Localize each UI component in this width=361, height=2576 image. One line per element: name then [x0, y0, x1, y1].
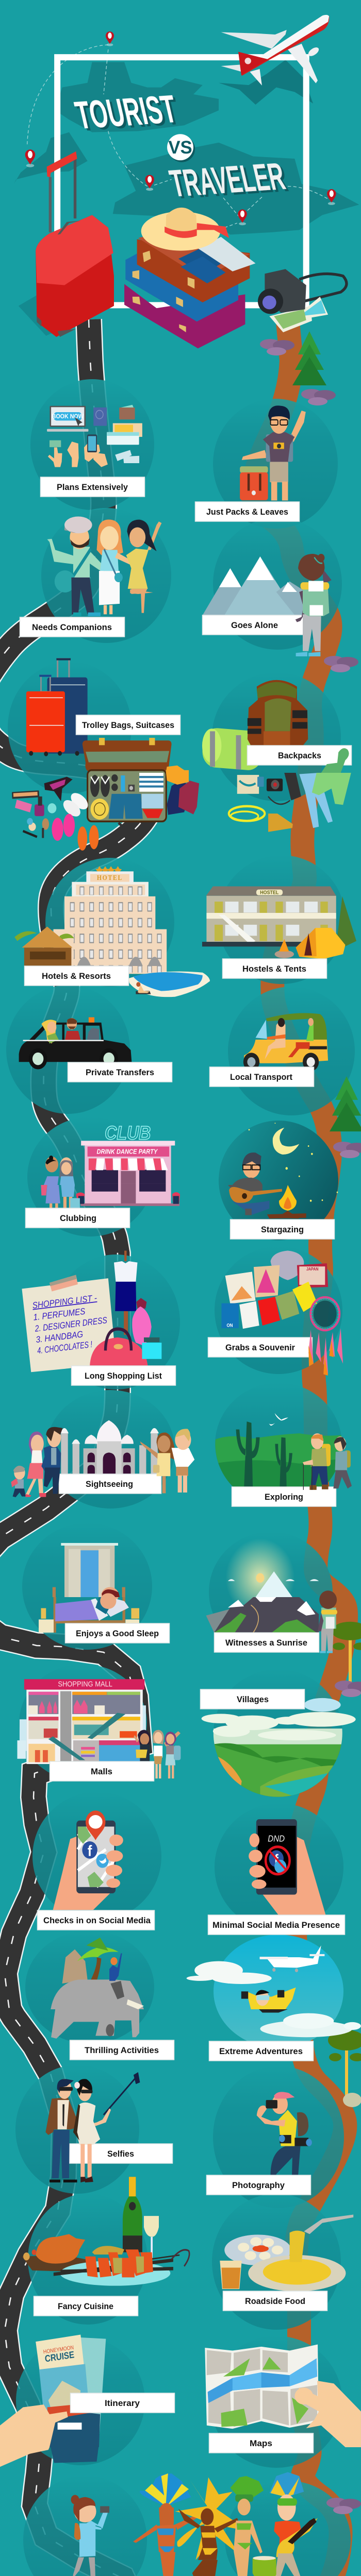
club base: [41, 1183, 180, 1208]
label: Just Packs & Leaves: Just Packs & Leaves: [206, 507, 288, 517]
dress, perfume and handbag: [90, 1251, 161, 1366]
title: tourist: TOURIST: [72, 88, 180, 138]
band 4: [22, 1183, 346, 1617]
label: Villages: [200, 1689, 304, 1709]
birds: [269, 1413, 288, 1426]
elephant lower: [51, 2009, 139, 2039]
label: Photography: Photography: [232, 2180, 285, 2190]
label: Exploring: Exploring: [265, 1492, 303, 1502]
label: Hostels & Tents: Hostels & Tents: [242, 964, 306, 974]
label: Enjoys a Good Sleep: [65, 1623, 169, 1643]
shopping list note: 2. DESIGNER DRESS: [34, 1315, 108, 1334]
hotel building: HOTEL: [97, 874, 123, 882]
club building: [44, 1123, 175, 1185]
label: Hotels & Resorts: [25, 966, 129, 986]
dashed flight routes: [27, 45, 328, 228]
pool lounger: [136, 982, 151, 994]
extreme adventures plane and cloud: [187, 1945, 324, 2009]
checks-in phone: [53, 1810, 123, 1910]
label: Itinerary: Itinerary: [105, 2398, 140, 2408]
private car: [19, 1017, 132, 1070]
label: Checks in on Social Media: [37, 1910, 155, 1930]
band 6: [0, 2009, 361, 2447]
plans extensively icons: [47, 405, 142, 467]
label: Long Shopping List: [71, 1366, 175, 1385]
mall shoppers: [134, 1730, 180, 1778]
label: Trolley Bags, Suitcases: Trolley Bags, Suitcases: [82, 720, 174, 730]
label: Fancy Cuisine: [34, 2296, 138, 2316]
samba dancers: [133, 2473, 264, 2576]
itinerary brochure: [0, 2335, 106, 2447]
sightseeing families: [11, 1427, 194, 1497]
vs badge: VS: [168, 138, 192, 158]
label: Stargazing: [230, 1219, 334, 1239]
shopping list note: 1. PERFUMES: [33, 1307, 86, 1323]
label: Exploring: [232, 1487, 336, 1506]
thrilling activities elephant: [51, 1938, 144, 2009]
minimal social phone: DND: [268, 1834, 285, 1844]
dirt trail: [252, 322, 346, 2576]
label: Needs Companions: Needs Companions: [32, 622, 112, 632]
band 3: [12, 770, 356, 1185]
trolley bags: [26, 658, 88, 756]
label: Goes Alone: Goes Alone: [231, 620, 278, 630]
traveler gear: [229, 773, 351, 832]
souvenirs: [221, 1251, 328, 1329]
good sleep window: [53, 1543, 125, 1603]
village clouds: [202, 1698, 356, 1740]
photographer: [257, 2092, 312, 2176]
selfie couple: [45, 2072, 140, 2182]
label: Villages: Villages: [237, 1694, 269, 1704]
dreamcatcher: [308, 1297, 343, 1376]
label: Stargazing: Stargazing: [261, 1225, 304, 1234]
camera and photos: [258, 269, 347, 332]
hostel and tent: HOSTEL: [260, 890, 279, 896]
sleep bed: [39, 1593, 139, 1633]
red trolley suitcase: [19, 151, 114, 337]
label: Grabs a Souvenir: Grabs a Souvenir: [225, 1343, 295, 1352]
label: Local Transport: Local Transport: [230, 1072, 292, 1082]
shopping list note: [22, 1275, 116, 1372]
label: Sightseeing: [59, 1474, 161, 1494]
exploring hikers: [303, 1433, 352, 1490]
spoon in backpacks label: [321, 748, 349, 773]
shopping list note: 3. HANDBAG: [36, 1329, 84, 1345]
extreme lower: [259, 2009, 361, 2037]
label: Just Packs & Leaves: [195, 502, 299, 521]
sunrise glow and peak: [225, 1538, 319, 1617]
label: Minimal Social Media Presence: [208, 1915, 344, 1935]
shopping mall: [17, 1679, 146, 1764]
exploring landscape: [215, 1421, 341, 1487]
label: Enjoys a Good Sleep: Enjoys a Good Sleep: [76, 1629, 159, 1638]
needs companions group: [47, 517, 161, 616]
road: [0, 319, 149, 2576]
map: [205, 2345, 319, 2429]
foreground overlays: [11, 554, 352, 2404]
sunrise mountains: [206, 1597, 319, 1633]
itinerary brochure: HONEYMOON: [43, 2345, 74, 2355]
label: Witnesses a Sunrise: Witnesses a Sunrise: [225, 1638, 307, 1648]
label: Clubbing: Clubbing: [60, 1213, 96, 1223]
label: Itinerary: [70, 2393, 174, 2413]
label: Hostels & Tents: [223, 959, 327, 978]
vs badge: [167, 134, 195, 162]
observes woman: [71, 2495, 109, 2576]
hand holding map: [296, 2381, 361, 2447]
label: Backpacks: Backpacks: [278, 751, 321, 760]
label: Backpacks: [248, 745, 352, 765]
itinerary bottom and hand: [0, 2447, 99, 2467]
label: Malls: Malls: [91, 1767, 112, 1776]
shopping list note: SHOPPING LIST -: [32, 1293, 97, 1311]
label: Maps: [209, 2433, 314, 2453]
world map backdrop: [14, 60, 359, 234]
header white frame: [57, 57, 306, 305]
label: Thrilling Activities: Thrilling Activities: [85, 2045, 159, 2055]
minimal social phone: f: [274, 1852, 278, 1868]
band 7: [0, 2447, 361, 2576]
header band: [19, 15, 347, 348]
label: Local Transport: [209, 1067, 314, 1087]
shopping mall: SHOPPING MALL: [58, 1680, 112, 1688]
hiker overlapping the Goes Alone label: [296, 554, 332, 656]
club building: CLUB: [105, 1123, 151, 1144]
label: Minimal Social Media Presence: Minimal Social Media Presence: [212, 1920, 340, 1930]
label: Thrilling Activities: [70, 2040, 174, 2060]
sunrise hiker: [318, 1590, 337, 1653]
label: Selfies: [69, 2144, 172, 2163]
cosmetics and shoes: [12, 777, 99, 851]
label: Selfies: Selfies: [107, 2149, 134, 2159]
sightseeing monument: [60, 1420, 159, 1475]
label: Hotels & Resorts: Hotels & Resorts: [42, 971, 111, 981]
open suitcase packed items: [88, 770, 199, 827]
club building: DRINK DANCE PARTY: [96, 1148, 158, 1155]
label: Roadside Food: [223, 2291, 327, 2311]
blends in man with guitar: [253, 2472, 318, 2576]
roadside food: [220, 2214, 353, 2292]
stacked suitcases: [124, 208, 256, 348]
label: Goes Alone: [202, 615, 306, 635]
just packs man: [240, 405, 306, 500]
village landscape: [214, 1728, 342, 1797]
shopping list note: 4. CHOCOLATES !: [37, 1340, 93, 1356]
band 5: [17, 1593, 356, 2009]
tuk tuk: [243, 1013, 328, 1071]
label: Private Transfers: [68, 1062, 172, 1082]
stargazing head and moon: [233, 1123, 313, 1185]
hotel building: [14, 866, 167, 974]
label: Sightseeing: Sightseeing: [86, 1479, 133, 1489]
airplane: [221, 15, 329, 86]
label: Plans Extensively: [40, 477, 144, 497]
label: Private Transfers: Private Transfers: [86, 1067, 154, 1077]
checks-in phone: f: [88, 1842, 92, 1859]
label: Plans Extensively: Plans Extensively: [57, 482, 128, 492]
hostel and tent: [202, 886, 356, 959]
label: Needs Companions: [20, 617, 125, 637]
label: Grabs a Souvenir: [208, 1337, 313, 1357]
itinerary brochure: CRUISE: [44, 2349, 75, 2364]
minimal social phone: [249, 1819, 326, 1915]
backpack gear: [202, 680, 308, 771]
location pins: [25, 31, 336, 225]
goes alone mountains: [203, 556, 306, 615]
souvenirs: ON: [226, 1323, 233, 1328]
label: Maps: Maps: [250, 2438, 272, 2448]
label: Malls: [50, 1761, 154, 1781]
label: Checks in on Social Media: Checks in on Social Media: [43, 1916, 151, 1925]
label: Trolley Bags, Suitcases: [76, 715, 180, 735]
map hand thumb: [294, 2388, 313, 2404]
label: Extreme Adventures: Extreme Adventures: [219, 2046, 303, 2056]
label: Photography: [206, 2175, 310, 2195]
hotel pool: [128, 972, 210, 997]
fancy cuisine: [22, 2177, 189, 2286]
band 2: [26, 405, 308, 773]
label: Clubbing: [26, 1208, 130, 1228]
trees and rocks along the trail: [255, 331, 361, 2576]
label: Fancy Cuisine: Fancy Cuisine: [58, 2301, 113, 2311]
label: Witnesses a Sunrise: [215, 1633, 319, 1652]
label: Long Shopping List: Long Shopping List: [85, 1371, 162, 1381]
plans extensively icons: BOOK NOW: [52, 414, 84, 420]
label: Extreme Adventures: [209, 2041, 314, 2061]
label: Roadside Food: Roadside Food: [245, 2296, 305, 2306]
open suitcase lid: [83, 738, 188, 773]
stargazer and campfire: [228, 1185, 338, 1218]
souvenirs: JAPAN: [306, 1266, 319, 1272]
